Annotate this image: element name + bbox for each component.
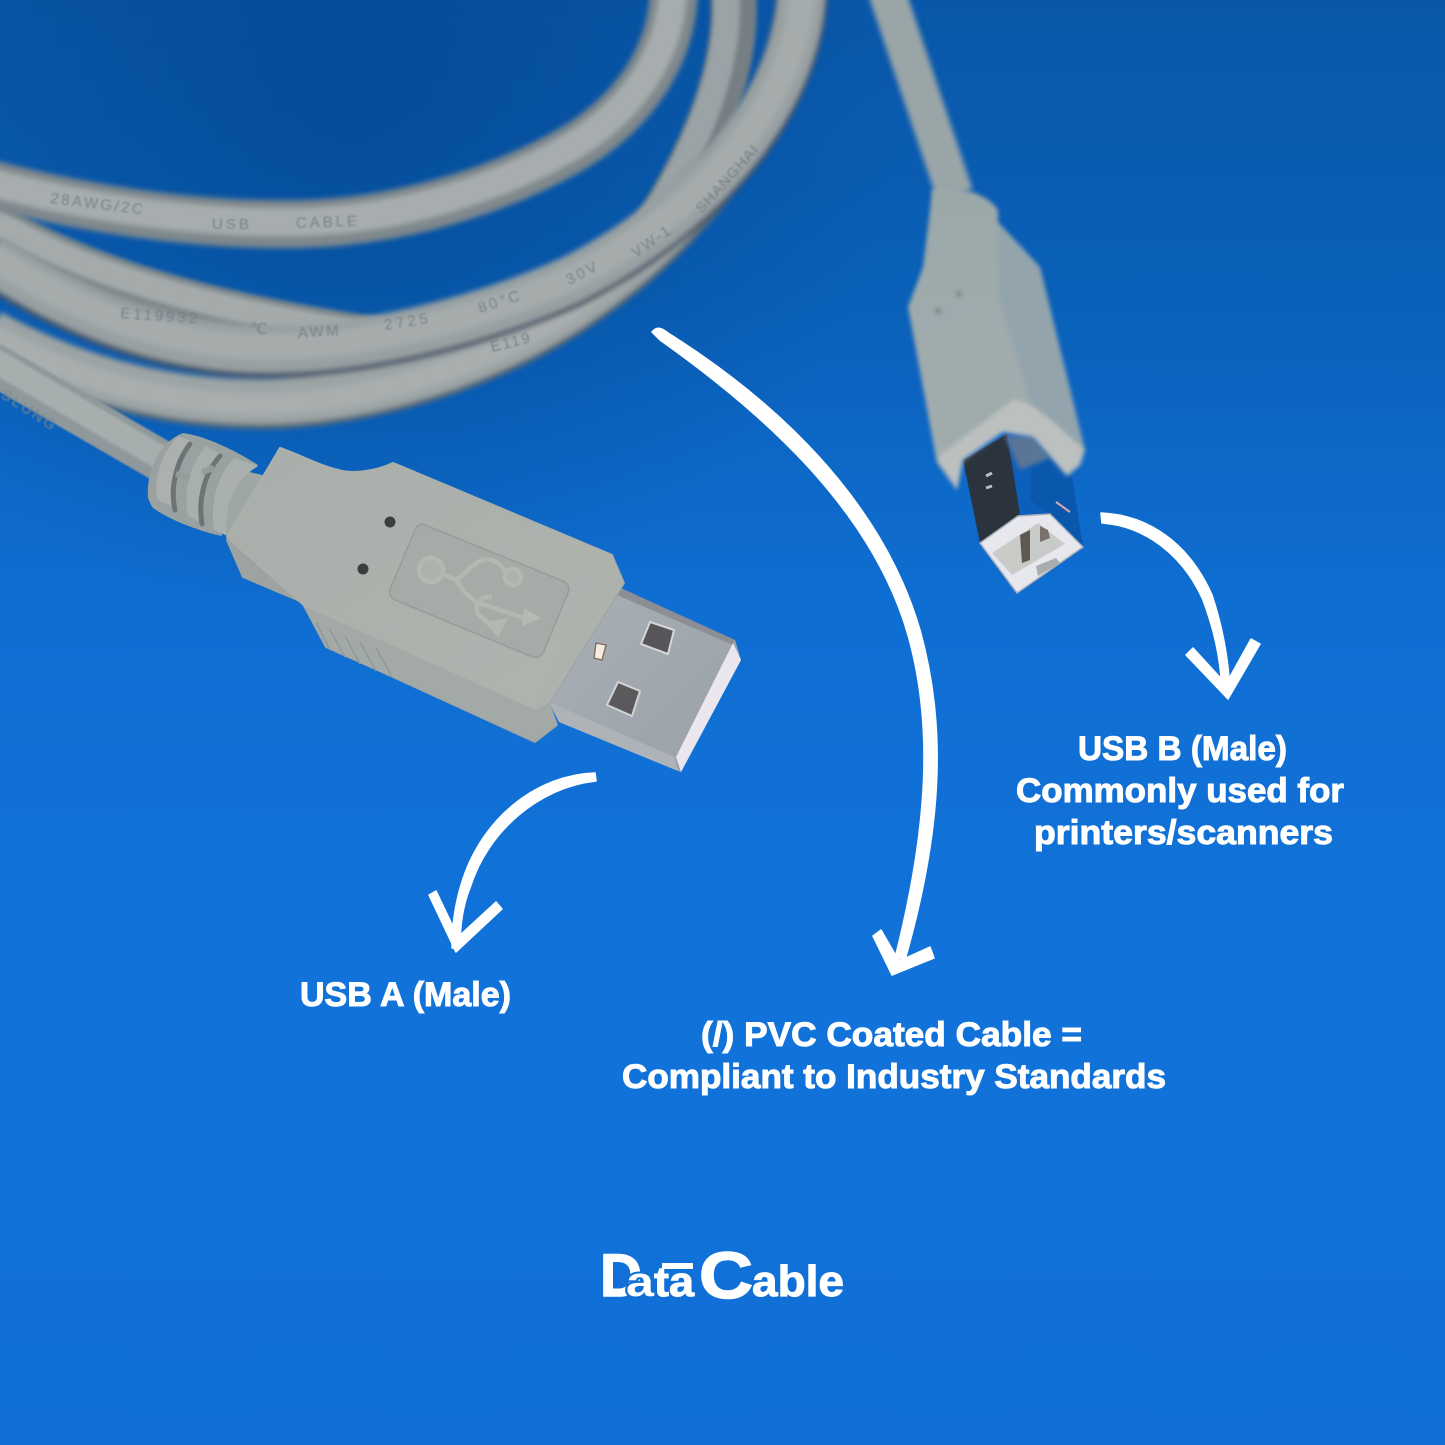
label: USB B: [1016, 730, 1344, 852]
cable print text: SHANGHAI: [692, 141, 763, 217]
cable print text: 2725: [383, 310, 432, 334]
photo: USB A male plug: [148, 433, 741, 772]
cable print text: VW-1: [629, 221, 675, 261]
logo: DataCable: a: [626, 1258, 655, 1305]
cable print text: 80°C: [476, 287, 525, 317]
logo: DataCable: D: [600, 1242, 642, 1309]
cable to USB B plug: [886, 0, 955, 195]
arrow: to USB B label: [1101, 513, 1260, 699]
metal shell: [549, 583, 741, 772]
arrow: to PVC cable label: [652, 328, 937, 975]
plug opening: [980, 514, 1083, 593]
cable print text: 28AWG/2C: [50, 190, 146, 219]
logo: DataCable: [600, 1238, 844, 1312]
strain relief: [148, 433, 285, 545]
label: USB B: USB B (Male): [1078, 730, 1287, 768]
metal shell: [963, 432, 1083, 593]
logo: DataCable: C: [699, 1238, 753, 1312]
label: USB A: USB A (Male): [300, 976, 511, 1014]
cable print text: E119: [489, 329, 534, 356]
cable print text: 30V: [563, 257, 603, 289]
logo: DataCable: ta: [654, 1258, 695, 1305]
plug body: [227, 448, 624, 742]
USB trident logo panel: [390, 524, 569, 657]
label: PVC coated cable: [622, 1016, 1166, 1096]
label: USB B: Commonly used for: [1016, 772, 1344, 810]
cable print text: E119932: [120, 305, 201, 328]
label: PVC coated cable: (/) PVC Coated Cable =: [701, 1016, 1082, 1054]
logo: DataCable: able: [752, 1257, 844, 1306]
photo: coiled grey PVC cable: [0, 0, 803, 404]
label: USB B: printers/scanners: [1034, 814, 1333, 852]
label: PVC coated cable: Compliant to Industry Standards: [622, 1058, 1166, 1096]
cable print text: AWM: [297, 322, 342, 342]
body: [908, 188, 1085, 490]
cable print text: USB: [212, 216, 252, 233]
cable print text: ℃: [250, 320, 270, 338]
cable print text: CABLE: [296, 213, 360, 232]
photo: cable leading to USB A plug: [0, 358, 180, 472]
photo: USB B male plug (out of focus): [886, 0, 1085, 593]
arrow: to USB A label: [429, 773, 596, 952]
cable print text: [50, 141, 763, 356]
